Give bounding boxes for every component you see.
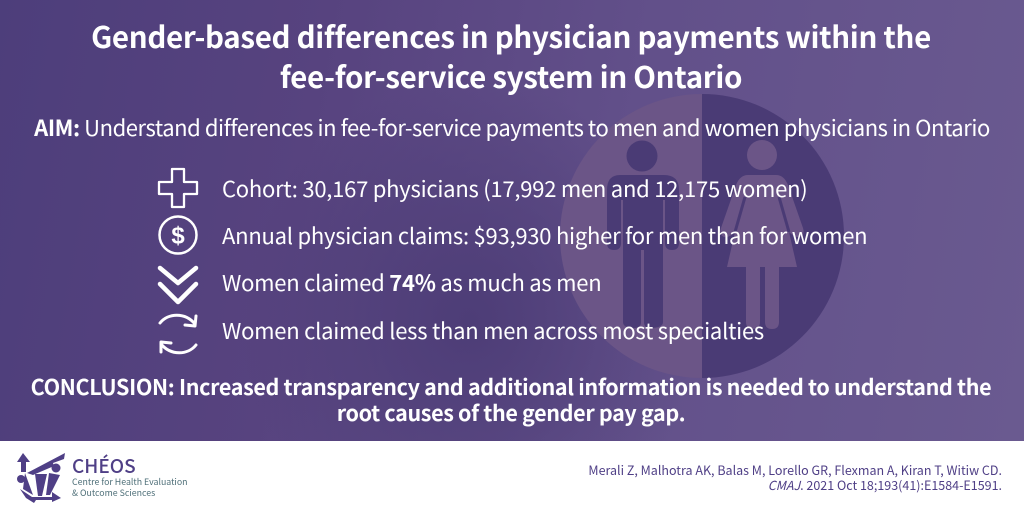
logo: centre name [72,475,188,498]
text: percentage claimed: Women claimed 74% as much as men [222,266,601,298]
icon: circular arrows [158,314,198,354]
conclusion [31,371,991,428]
illustration: gender circle [560,94,844,378]
logo: CHEOS wordmark: CHÉOS [72,452,136,479]
text: annual claims: Annual physician claims: $93,930 higher for men than for women [222,219,867,251]
title [91,15,931,96]
conclusion: root causes of the gender pay gap. [337,397,685,428]
aim statement: AIM: Understand differences in fee-for-service payments to men and women physicians in Ontario [34,111,990,143]
logo: CHEOS mark [17,453,65,503]
conclusion: CONCLUSION: Increased transparency and additional information is needed to understand the [31,371,991,402]
text: cohort: Cohort: 30,167 physicians (17,992 men and 12,175 women) [222,172,808,204]
citation: Merali Z, Malhotra AK, Balas M, Lorello GR, Flexman A, Kiran T, Witiw CD. [588,460,1002,479]
citation: CMAJ. 2021 Oct 18;193(41):E1584-E1591. [768,475,1002,494]
logo: centre name: Centre for Health Evaluation [72,475,188,488]
icon: medical cross [158,168,198,208]
logo: centre name: & Outcome Sciences [72,486,155,498]
title: fee-for-service system in Ontario [280,54,742,96]
citation [588,460,1002,494]
icon: dollar coin [158,215,198,255]
icon: dollar coin: $ [171,222,185,250]
icon: double down chevrons [158,266,198,304]
text: specialties: Women claimed less than men across most specialties [222,314,764,346]
title: Gender-based differences in physician payments within the [91,15,931,57]
panel: footer [0,441,1024,512]
